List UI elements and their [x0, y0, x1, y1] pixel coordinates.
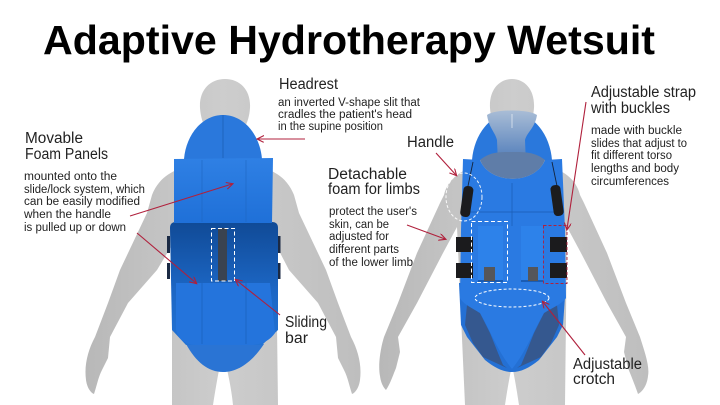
transparent head overlay [487, 110, 537, 165]
left handle [460, 185, 474, 218]
dashed callouts [472, 222, 508, 282]
middle back section [170, 222, 278, 345]
main vest body [460, 159, 566, 369]
right handle [550, 184, 564, 217]
mannequin: back view [85, 79, 361, 405]
label: adjustable strap: made with buckle [591, 125, 682, 137]
sliding bar [218, 228, 227, 281]
label: adjustable strap: lengths and body [591, 163, 679, 175]
pocket tabs [484, 267, 538, 281]
label: detachable foam: of the lower limb [329, 257, 413, 269]
foam pockets [478, 226, 543, 280]
label: adjustable strap: circumferences [591, 176, 669, 188]
left dark shell [465, 305, 507, 368]
label: movable foam panels: slide/lock system, which [24, 184, 145, 196]
label: handle: Handle [407, 134, 454, 151]
mannequin: front view [379, 79, 648, 405]
label: sliding bar: Sliding [285, 314, 327, 331]
upper foam panel [174, 158, 273, 223]
label: headrest [278, 76, 421, 133]
label: adjustable crotch: crotch [573, 371, 615, 388]
bottom crotch dome [186, 344, 264, 372]
label: adjustable strap: fit different torso [591, 150, 672, 162]
label: adjustable strap [590, 84, 696, 188]
lower foam panel [176, 283, 275, 345]
label: adjustable crotch: Adjustable [573, 356, 642, 373]
left buckles [456, 237, 473, 278]
label: movable foam panels: mounted onto the [24, 171, 117, 183]
lower body with rim [459, 283, 566, 372]
headrest foam [184, 115, 262, 159]
dashed outline of sliding bar [212, 228, 234, 281]
label: movable foam panels [23, 130, 145, 234]
arrows [130, 102, 586, 355]
label: adjustable strap: with buckles [590, 100, 670, 117]
label: movable foam panels: Foam Panels [25, 146, 108, 163]
label: sliding bar [285, 314, 327, 347]
label: movable foam panels: is pulled up or down [24, 222, 126, 234]
side straps [167, 236, 280, 279]
right buckles [550, 237, 567, 278]
wetsuit: back view [167, 115, 280, 372]
label: movable foam panels: can be easily modified [24, 196, 140, 208]
wetsuit: front view [446, 110, 567, 372]
label: detachable foam: foam for limbs [328, 181, 420, 198]
label: detachable foam: Detachable [328, 166, 407, 183]
label: detachable foam: different parts [329, 244, 399, 256]
label: adjustable strap: Adjustable strap [591, 84, 696, 101]
label: headrest: in the supine position [278, 121, 383, 133]
title: Adaptive Hydrotherapy Wetsuit [43, 17, 655, 63]
headrest dome [472, 113, 552, 160]
label: headrest: cradles the patient's head [278, 109, 412, 121]
label: detachable foam: skin, can be [329, 219, 389, 231]
right dark shell [517, 305, 559, 368]
center seams [466, 183, 560, 226]
label: movable foam panels: when the handle [23, 209, 111, 221]
label: detachable foam [328, 166, 420, 269]
label: headrest: Headrest [279, 76, 339, 93]
label: detachable foam: adjusted for [329, 231, 389, 243]
neck opening [480, 152, 545, 179]
label: sliding bar: bar [285, 330, 308, 347]
label: adjustable strap: slides that adjust to [591, 138, 687, 150]
label: adjustable crotch [573, 356, 642, 388]
label: movable foam panels: Movable [25, 130, 83, 147]
shoulder straps [468, 162, 557, 186]
label: headrest: an inverted V-shape slit that [278, 97, 421, 109]
label: detachable foam: protect the user's [329, 206, 417, 218]
